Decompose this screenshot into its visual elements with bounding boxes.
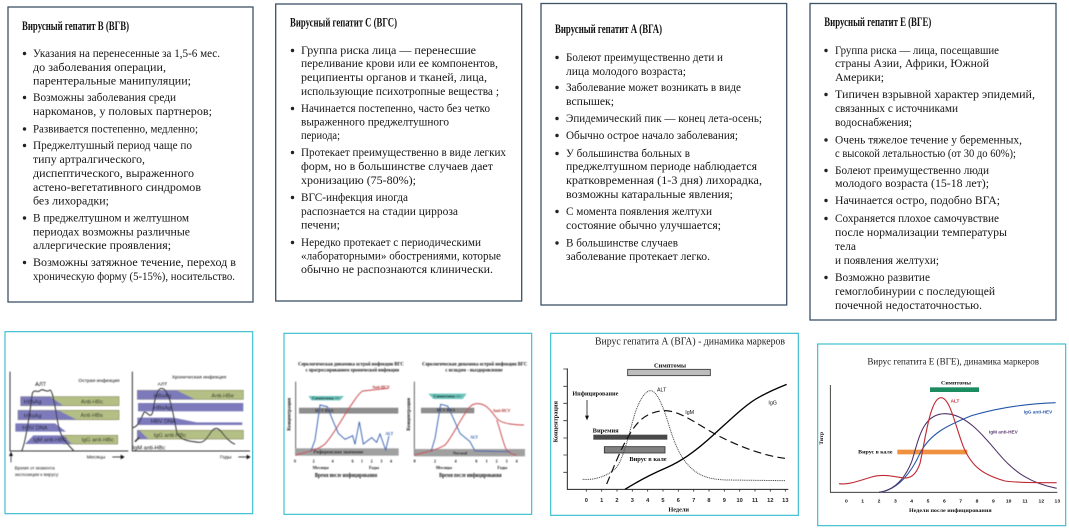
axes: 10: [1006, 499, 1012, 505]
bullet list: hepatitis C: «лабораторными» обострениями, которые: [301, 248, 501, 262]
graph: chronic outcome: 1: [361, 458, 363, 463]
bullet list: hepatitis C: хронизацию (75-80%);: [301, 173, 416, 187]
bullet list: hepatitis C: Нередко протекает с периодическими: [301, 235, 482, 249]
bullet list: hepatitis E: и появления желтухи;: [835, 253, 939, 267]
axes: Недели после инфицирования: [909, 507, 992, 514]
bullet list: hepatitis A: лица молодого возраста;: [566, 64, 686, 78]
graph: chronic outcome: 0: [294, 458, 296, 463]
bullet list: hepatitis C: ВГС-инфекция иногда: [301, 190, 409, 204]
chronic infection graph: Хроническая инфекция: [172, 375, 226, 381]
axes: 11: [752, 498, 758, 504]
chronic infection graph: IgM anti-HBc: [133, 445, 166, 451]
panel: hepatitis B: [8, 7, 253, 302]
bullet list: hepatitis E: Сохраняется плохое самочувствие: [835, 211, 999, 225]
bullet list: hepatitis B: наркоманов, у половых партнеров;: [33, 104, 212, 118]
bullet list: hepatitis E: Америки;: [835, 70, 884, 84]
axes: 3: [894, 499, 897, 505]
bullet list: hepatitis C: реципиенты органов и тканей, лица,: [301, 70, 487, 84]
virus in stool bar: [604, 447, 667, 463]
panel: hepatitis E: [810, 4, 1056, 320]
graph: chronic outcome: Симптомы +/-: [312, 395, 340, 400]
axes: 9: [992, 499, 995, 505]
axes: Концентрация: [553, 400, 559, 442]
bullet list: hepatitis E: [824, 43, 1035, 312]
bullet list: hepatitis B: Развивается постепенно, медленно;: [33, 122, 198, 136]
bullet list: hepatitis E: водоснабжения;: [835, 115, 912, 129]
axes: 12: [1039, 499, 1044, 505]
bullet list: hepatitis C: использующие психотропные вещества ;: [301, 84, 499, 98]
chronic infection graph: Годы: [220, 455, 232, 461]
bullet list: hepatitis A: С момента появления желтухи: [566, 204, 713, 218]
bullet list: hepatitis A: кратковременная (1-3 дня) лихорадка,: [566, 173, 762, 187]
axes: 12: [767, 498, 773, 504]
IgG curve: [879, 403, 1056, 492]
bullet list: hepatitis A: Обычно острое начало заболевания;: [566, 128, 738, 142]
bullet list: hepatitis C: Начинается постепенно, часто без четко: [301, 101, 490, 115]
bullet list: hepatitis B: периодах возможны различные: [33, 224, 190, 238]
graph: recovery outcome: Normal: [453, 450, 468, 455]
bullet list: hepatitis A: преджелтушном периоде наблюдается: [566, 159, 757, 173]
bullet list: hepatitis C: [291, 43, 506, 276]
bullet list: hepatitis B: до заболевания операции,: [33, 60, 166, 74]
graph: recovery outcome: Годы: [497, 465, 508, 470]
chart: hepatitis E marker dynamics: [818, 344, 1066, 526]
graph: chronic outcome: ALT: [385, 431, 394, 436]
chronic infection graph: АЛТ: [157, 381, 167, 387]
graph: chronic outcome: с прогрессированием хронической инфекции: [306, 367, 399, 374]
graph: recovery outcome: Симптомы +/-: [433, 394, 462, 399]
acute infection graph: IgG anti-HBc: [81, 438, 114, 444]
graph: recovery outcome: [407, 361, 527, 479]
axes: 13: [782, 498, 788, 504]
symptoms bar: [930, 380, 979, 392]
IgG curve: IgG: [768, 401, 777, 407]
graph: recovery outcome: Серологическая динамика острой инфекции ВГС: [422, 361, 527, 368]
acute infection graph: HBV DNA: [22, 425, 48, 431]
graph: chronic outcome: Концентрация: [288, 398, 293, 431]
axes: 3: [631, 498, 634, 504]
axes: 10: [737, 498, 743, 504]
bullet list: hepatitis C: Группа риска лица — перенесшие: [301, 43, 476, 57]
graph: recovery outcome: Время после инфицирования: [439, 472, 502, 479]
graph: chronic outcome: 4: [332, 458, 334, 463]
ALT curve: ALT: [951, 399, 960, 404]
graph: chronic outcome: [288, 361, 404, 479]
axes: 1: [600, 498, 603, 504]
bullet list: hepatitis B: диспептического, выраженного: [33, 166, 194, 180]
bullet list: hepatitis B: Возможны затяжное течение, переход в: [33, 255, 236, 269]
axes: 8: [707, 498, 711, 504]
bullet list: hepatitis B: Преджелтушный период чаще по: [33, 138, 192, 152]
chart: hepatitis B marker dynamics: [5, 332, 253, 514]
IgM curve: [879, 414, 1057, 492]
axes: 5: [927, 499, 930, 505]
bullet list: hepatitis A: возможны катаральные явления;: [566, 187, 733, 201]
bullet list: hepatitis E: гемоглобинурии с последующей: [835, 284, 996, 298]
panel: hepatitis A: [541, 4, 787, 305]
axes: 0: [585, 498, 588, 504]
symptoms bar: Симптомы: [654, 362, 686, 369]
bullet list: hepatitis E: Группа риска — лица, посещавшие: [835, 43, 999, 57]
bullet list: hepatitis A: В большинстве случаев: [566, 236, 678, 250]
graph: recovery outcome: 6: [475, 458, 477, 463]
graph: chronic outcome: Anti-HCV: [372, 384, 390, 389]
axes: 2: [615, 498, 619, 504]
graph: recovery outcome: 1: [486, 458, 488, 463]
bullet list: hepatitis C: обычно не распознаются клинически.: [301, 262, 493, 276]
axes: 2: [878, 499, 881, 505]
axes: 9: [723, 498, 726, 504]
graph: chronic outcome: 4: [390, 458, 392, 463]
graph: chronic outcome: 2: [313, 458, 315, 463]
chart: hepatitis C marker dynamics: [284, 333, 532, 514]
chart title: Вирус гепатита А (ВГА) - динамика маркеров: [595, 337, 785, 348]
viremia bar: Виремия: [593, 428, 619, 435]
bullet list: hepatitis E: страны Азии, Африки, Южной: [835, 56, 990, 70]
graph: recovery outcome: Концентрация: [407, 398, 412, 431]
graph: recovery outcome: 4: [455, 458, 457, 463]
bullet list: hepatitis A: вспышек;: [566, 94, 614, 108]
acute infection graph: Время от момента: [15, 466, 55, 471]
bullet list: hepatitis E: молодого возраста (15-18 лет);: [835, 176, 989, 190]
bullet list: hepatitis B: парентеральные манипуляции;: [33, 74, 191, 88]
IgM curve: IgM: [685, 410, 694, 416]
heading: hepatitis C: Вирусный гепатит С (ВГС): [290, 16, 397, 30]
virus in stool bar: [858, 450, 967, 456]
bullet list: hepatitis C: Протекает преимущественно в виде легких: [301, 145, 506, 159]
ALT curve: ALT: [657, 388, 667, 394]
graph: chronic outcome: 3: [380, 458, 382, 463]
graph: recovery outcome: ALT: [470, 435, 478, 440]
chart title: Вирус гепатита Е (ВГЕ), динамика маркеров: [867, 357, 1039, 367]
graph: recovery outcome: Anti-HCV: [493, 408, 511, 413]
axes: 11: [1022, 499, 1028, 505]
acute infection graph: [9, 372, 128, 477]
chronic infection graph: Anti-HBe: [211, 393, 234, 399]
bullet list: hepatitis E: Очень тяжелое течение у беременных,: [835, 132, 1022, 146]
bullet list: hepatitis B: астено-вегетативного синдромов: [33, 180, 201, 194]
bullet list: hepatitis E: тела: [835, 239, 857, 253]
virus in stool bar: Вирус в кале: [858, 450, 893, 456]
axes: 0: [845, 499, 848, 505]
axes: [819, 385, 1060, 514]
acute infection graph: HBsAg: [24, 400, 41, 406]
bullet list: hepatitis B: типу артралгического,: [33, 152, 145, 166]
panel: hepatitis C: [276, 4, 522, 301]
bullet list: hepatitis A: заболевание протекает легко.: [566, 249, 710, 263]
axes: Недели: [668, 507, 690, 513]
graph: chronic outcome: Годы: [369, 465, 380, 470]
bullet list: hepatitis B: Возможны заболевания среди: [33, 90, 177, 104]
axes: 1: [861, 499, 864, 505]
bullet list: hepatitis E: после нормализации температуры: [835, 225, 1007, 239]
acute infection graph: экспозиции к вирусу: [15, 472, 59, 477]
bullet list: hepatitis C: распознается на стадии цирроза: [301, 204, 459, 218]
graph: recovery outcome: 2: [496, 458, 498, 463]
graph: recovery outcome: с исходом - выздоровление: [445, 368, 503, 374]
chronic infection graph: IgG anti-HBc: [154, 433, 186, 439]
infection arrow: Инфицирование: [572, 390, 619, 397]
heading: hepatitis A: Вирусный гепатит А (ВГА): [555, 22, 662, 36]
ALT curve: [839, 398, 1057, 484]
bullet list: hepatitis E: Болеют преимущественно люди: [835, 163, 990, 177]
graph: recovery outcome: 2: [434, 458, 436, 463]
bullet list: hepatitis A: Эпидемический пик — конец лета-осень;: [566, 111, 762, 125]
axes: 13: [1055, 499, 1060, 505]
bullet list: hepatitis B: без лихорадки;: [33, 194, 109, 208]
bullet list: hepatitis C: переливание крови или ее компонентов,: [301, 56, 498, 70]
bullet list: hepatitis A: Заболевание может возникать в виде: [566, 80, 741, 94]
chronic infection graph: HBV DNA: [151, 419, 176, 425]
bullet list: hepatitis B: аллергические проявления;: [33, 238, 171, 252]
IgM curve: [607, 410, 785, 484]
IgG curve: [625, 384, 787, 489]
bullet list: hepatitis C: выраженного преджелтушного: [301, 114, 449, 128]
bullet list: hepatitis C: печени;: [301, 218, 340, 232]
bullet list: hepatitis E: Типичен взрывной характер эпидемий,: [835, 87, 1035, 101]
graph: recovery outcome: 0: [414, 458, 416, 463]
graph: chronic outcome: Месяцы: [313, 465, 329, 470]
bullet list: hepatitis C: периода;: [301, 128, 340, 142]
bullet list: hepatitis E: с высокой летальностью (от 30 до 60%);: [835, 146, 1016, 160]
axes: 4: [910, 499, 913, 505]
bullet list: hepatitis B: хроническую форму (5-15%), носительство.: [33, 269, 235, 283]
IgG curve: IgG anti-HEV: [1024, 409, 1053, 414]
bullet list: hepatitis A: У большинства больных в: [566, 146, 690, 160]
infection arrow: [572, 390, 619, 420]
bullet list: hepatitis E: Начинается остро, подобно ВГА;: [835, 193, 1000, 207]
acute infection graph: Острая инфекция: [78, 378, 120, 384]
acute infection graph: АЛТ: [35, 382, 47, 388]
chronic infection graph: HBsAg: [154, 405, 171, 411]
symptoms bar: [628, 362, 710, 376]
axes: 8: [976, 499, 979, 505]
acute infection graph: Месяцы: [87, 455, 106, 461]
chronic infection graph: [132, 372, 251, 461]
acute infection graph: Anti-HBs: [81, 413, 103, 419]
graph: recovery outcome: 3: [506, 458, 508, 463]
graph: recovery outcome: 4: [516, 458, 518, 463]
heading: hepatitis E: Вирусный гепатит Е (ВГЕ): [824, 15, 931, 29]
acute infection graph: Anti-HBc: [81, 400, 103, 406]
chronic infection graph: HBsAg: [154, 393, 171, 399]
graph: chronic outcome: Референсное значение: [313, 451, 364, 456]
graph: chronic outcome: Время после инфицирования: [315, 472, 378, 479]
ALT curve: [583, 388, 785, 481]
symptoms bar: Симптомы: [941, 380, 972, 386]
axes: 6: [677, 498, 680, 504]
acute infection graph: HBsAg: [24, 413, 41, 419]
bullet list: hepatitis A: [555, 50, 762, 263]
heading: hepatitis B: Вирусный гепатит В (ВГВ): [22, 19, 129, 33]
bullet list: hepatitis B: В преджелтушном и желтушном: [33, 210, 189, 224]
axes: Титр: [819, 432, 825, 445]
virus in stool bar: Вирус в кале: [629, 456, 667, 463]
graph: recovery outcome: HCV RNA: [437, 408, 455, 413]
bullet list: hepatitis E: связанных с источниками: [835, 101, 959, 115]
axes: 7: [692, 498, 695, 504]
chart: hepatitis A marker dynamics: [551, 333, 798, 515]
bullet list: hepatitis E: Возможно развитие: [835, 270, 930, 284]
bullet list: hepatitis A: Болеют преимущественно дети и: [566, 50, 724, 64]
bullet list: hepatitis A: состояние обычно улучшается;: [566, 218, 721, 232]
viremia bar: [593, 428, 667, 440]
axes: [553, 368, 788, 513]
axes: 7: [959, 499, 962, 505]
bullet list: hepatitis B: Указания на перенесенные за 1,5-6 мес.: [33, 46, 220, 60]
axes: 4: [646, 498, 650, 504]
IgM curve: IgM anti-HEV: [989, 429, 1019, 434]
graph: chronic outcome: HCV RNA: [315, 408, 334, 413]
bullet list: hepatitis C: форм, но в большинстве случаев дает: [301, 159, 494, 173]
graph: recovery outcome: Месяцы: [436, 465, 453, 470]
graph: chronic outcome: 2: [371, 458, 373, 463]
acute infection graph: IgM anti-HBC: [33, 438, 67, 444]
bullet list: hepatitis E: почечной недостаточностью.: [835, 298, 982, 312]
axes: 5: [661, 498, 665, 504]
axes: 6: [943, 499, 946, 505]
graph: chronic outcome: Серологическая динамика острой инфекции ВГС: [298, 361, 404, 368]
graph: chronic outcome: 6: [352, 458, 354, 463]
bullet list: hepatitis B: [23, 46, 236, 283]
